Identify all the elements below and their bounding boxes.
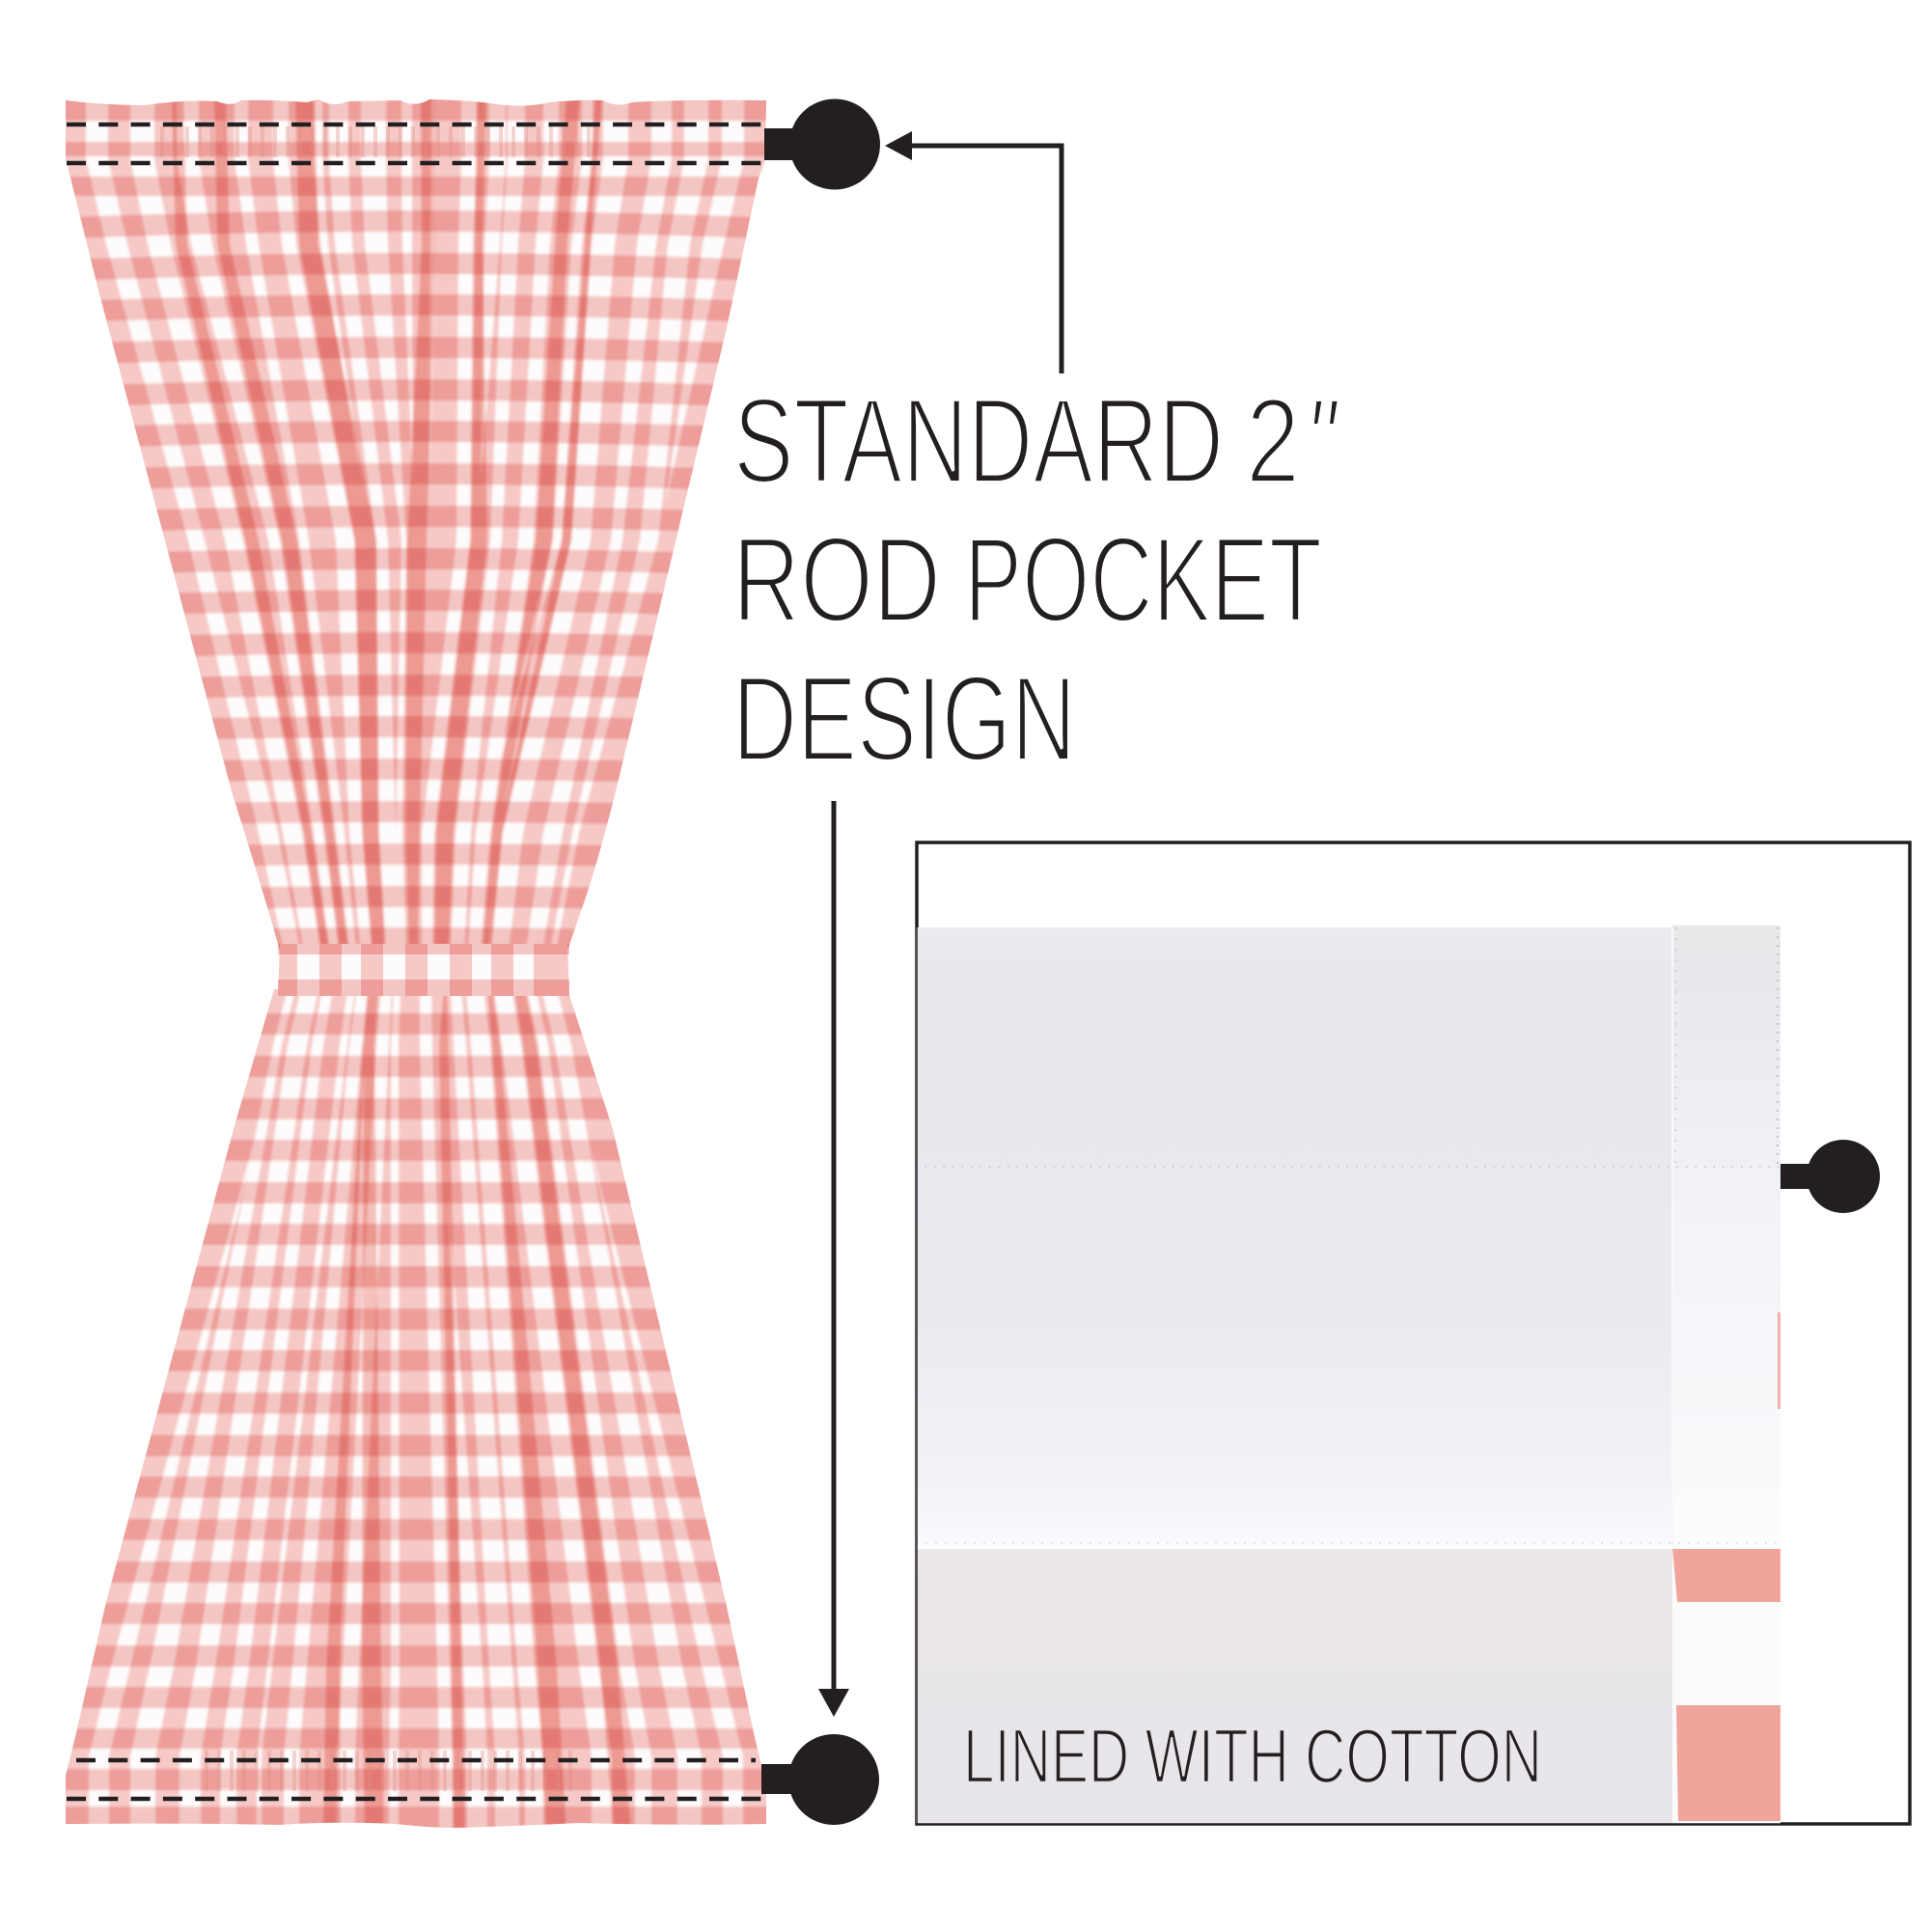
caption: lined with cotton: LINED WITH COTTON: [963, 1713, 1542, 1799]
top rod pocket stitching guides: [67, 124, 761, 163]
curtain: gingham door panel: [48, 87, 791, 1843]
heading line 2: ROD: [732, 513, 941, 648]
heading line 3: DESIGN: [732, 652, 1076, 787]
heading line 1: STANDARD: [733, 374, 1224, 509]
lining side hem: [1672, 925, 1780, 1547]
icon: top curtain rod: [764, 98, 880, 189]
icon: bottom curtain rod: [761, 1734, 879, 1825]
curtain tie-back band: [278, 944, 569, 996]
panel: lining detail frame: [917, 842, 1910, 1824]
panel: cotton lining photo: [916, 925, 1780, 1824]
heading line 1: ": [1305, 374, 1339, 509]
heading line 1: 2: [1246, 374, 1300, 509]
curtain lower section below the tie: [48, 984, 791, 1843]
pink edge sliver: [1778, 1312, 1780, 1409]
arrow: label to top rod: [885, 131, 1062, 373]
heading line 2: [732, 513, 1322, 648]
curtain upper section above the tie: [48, 87, 791, 955]
lining lower fabric: [916, 1547, 1672, 1824]
bottom rod pocket stitching guides: [67, 1760, 763, 1799]
arrow: label down to bottom rod: [818, 801, 849, 1717]
lower hem with pink stripes: [1672, 1547, 1780, 1824]
lining upper fabric: [916, 927, 1672, 1547]
icon: detail panel curtain rod: [1780, 1140, 1880, 1213]
heading: standard 2 inch rod pocket design: [732, 374, 1339, 787]
heading line 2: POCKET: [964, 513, 1322, 648]
